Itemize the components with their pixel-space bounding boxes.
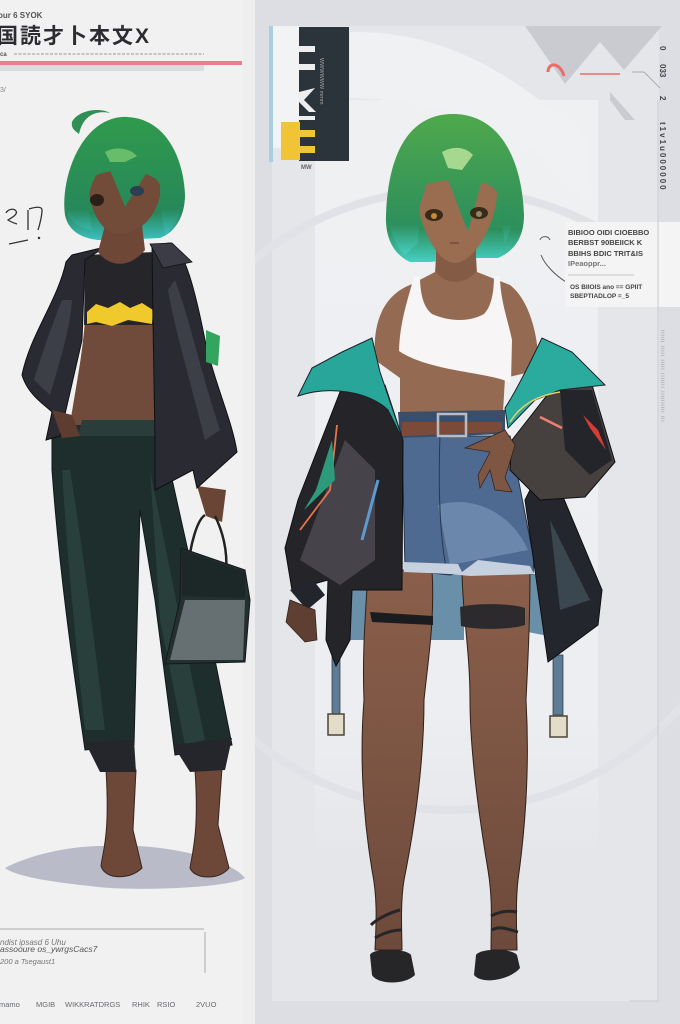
callout text box: BERBST 90BEIICK K <box>568 238 643 247</box>
dark title block <box>299 27 349 161</box>
inner jacket lining <box>350 574 544 640</box>
green shoulder patch <box>206 330 220 366</box>
footer note box: assooure os_ywrgsCacs7 <box>0 944 98 954</box>
left eyes <box>90 186 144 206</box>
strap buckles <box>328 714 567 737</box>
footer note box: ndist ipsasd 6 Uhu <box>0 938 66 947</box>
dark title block: WWWWWW mmm <box>318 58 324 105</box>
lowered left hand <box>286 600 317 642</box>
pen in pocket <box>362 480 378 540</box>
belt <box>398 410 505 438</box>
frayed hem <box>403 560 534 576</box>
white spine box <box>273 26 300 148</box>
right neck <box>436 235 476 282</box>
lighter swooshes <box>350 32 539 100</box>
hanging straps <box>332 655 563 715</box>
left hair back <box>64 117 185 240</box>
panel: left character sheet <box>0 0 255 1024</box>
left hand in pocket <box>52 410 80 438</box>
right jacket <box>505 338 615 662</box>
upper body skin <box>374 258 538 412</box>
right-side vertical text: 0 <box>658 46 667 51</box>
figure: right character <box>285 114 615 983</box>
footer text row <box>0 1000 217 1009</box>
right bangs <box>388 116 520 255</box>
right-side vertical text: 033 <box>658 64 667 78</box>
jacket <box>22 243 237 490</box>
yellow print <box>87 302 153 326</box>
colored chevrons on sleeve <box>583 415 606 450</box>
bag handles <box>188 515 226 572</box>
thigh strap <box>370 612 433 625</box>
far-right margin text: iiiiii iiiii iiiii iiiiiii iiiiiiiiii iii <box>659 330 665 423</box>
pink header bar <box>0 61 242 65</box>
white tank top <box>399 276 512 383</box>
left hood collar <box>150 243 192 268</box>
right eyes <box>425 207 488 221</box>
callout arc <box>540 237 566 282</box>
callout text box: OS BIIOIS ano == GPIIT <box>570 284 642 291</box>
caption under block: MW <box>301 165 312 171</box>
right-side vertical text: t1v1u000000 <box>658 122 667 192</box>
left bangs <box>66 118 183 235</box>
footer text row: WIKKRATDRGS <box>65 1000 120 1009</box>
left jacket <box>285 338 403 666</box>
left hair highlight <box>105 149 137 162</box>
right legs <box>362 570 530 950</box>
callout text box: BBIHS BDIC TRIT&IS <box>568 249 643 258</box>
right head <box>386 114 524 282</box>
transparent bag <box>165 548 250 664</box>
callout text box: SBEPTIADLOP =_5 <box>570 293 629 300</box>
small connector line <box>632 72 660 88</box>
right hand on hip <box>465 430 515 492</box>
yellow block <box>281 122 315 160</box>
footer note box <box>0 929 205 973</box>
crop top <box>84 252 155 325</box>
handwritten note <box>6 207 42 244</box>
neck and chest <box>98 225 145 264</box>
right mouth <box>450 242 459 244</box>
right hair highlight <box>442 148 473 170</box>
footer text row: RSIO <box>157 1000 176 1009</box>
left ahoge <box>72 110 110 134</box>
footer text row: RHIK <box>132 1000 150 1009</box>
sandals <box>370 910 520 982</box>
left face <box>88 171 161 234</box>
right hair back <box>386 114 524 262</box>
midriff <box>70 320 155 425</box>
belt band <box>78 420 155 436</box>
right hand on bag <box>197 486 226 522</box>
background ring <box>315 192 598 782</box>
left trousers <box>52 420 232 755</box>
figure: left character <box>22 110 250 877</box>
small side note: 3/ <box>0 87 6 94</box>
callout text box <box>565 222 680 307</box>
background inner glow <box>315 100 598 704</box>
right-side vertical text <box>660 46 666 190</box>
lace garter <box>460 604 525 629</box>
teal left lapel <box>298 338 403 440</box>
footer page line <box>630 100 658 1001</box>
right face <box>416 180 497 263</box>
right-side vertical text: 2 <box>658 96 667 101</box>
title: 国読才卜本文X <box>0 25 151 48</box>
callout text box: IPeaoppr... <box>568 259 606 268</box>
right sleeve <box>510 385 615 500</box>
footer text row: 2VUO <box>196 1000 217 1009</box>
panel: right character sheet <box>255 0 680 1024</box>
red marker <box>548 65 620 76</box>
blue accent line <box>269 26 273 162</box>
footer note box: 200 a Tsegaust1 <box>0 957 55 966</box>
trouser cuffs <box>85 738 232 772</box>
denim shorts <box>402 436 534 575</box>
callout text box: BIBIOO OIDI CIOEBBO <box>568 228 649 237</box>
left sleeve cuff <box>290 583 325 608</box>
footer text row: MGIB <box>36 1000 55 1009</box>
left feet <box>101 768 229 877</box>
shadow under left figure <box>5 846 245 889</box>
teal right lapel <box>505 338 605 428</box>
top-right geometric shapes <box>525 26 662 120</box>
header dotted rule: ca <box>0 52 7 58</box>
grey header shadow bar <box>0 65 204 71</box>
